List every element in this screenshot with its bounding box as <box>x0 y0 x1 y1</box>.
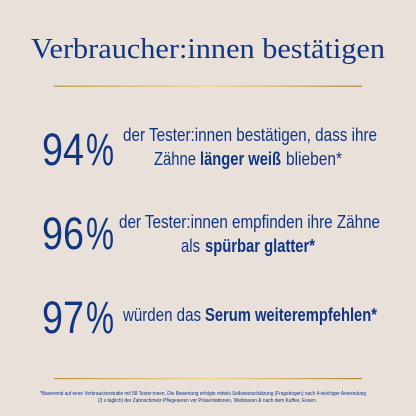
bottom gold divider <box>54 378 362 379</box>
stat number: 94%: % <box>86 124 114 175</box>
stat description line 2 <box>154 149 342 169</box>
stat number: 94%: 94 <box>42 124 84 175</box>
stat description line 2: spürbar glatter* <box>205 236 315 256</box>
stat description line 2: Zähne <box>154 149 196 169</box>
footnote <box>40 391 366 404</box>
stat description: würden das <box>122 305 201 325</box>
stat description <box>122 305 377 325</box>
stat number: 97%: % <box>86 292 114 343</box>
stat description line 2 <box>181 236 315 256</box>
stat number: 97% <box>42 292 114 343</box>
stat number: 94% <box>42 124 114 175</box>
stat description: Serum weiterempfehlen* <box>205 305 377 325</box>
stat number: 96% <box>42 208 114 259</box>
stat row: 96% <box>42 208 380 259</box>
stat number: 96%: % <box>86 208 114 259</box>
stat row: 94% <box>42 124 377 175</box>
title: Verbraucher:innen bestätigen <box>31 33 386 65</box>
stat description line 2: länger weiß <box>200 149 281 169</box>
stat description line 2: als <box>181 236 200 256</box>
footnote: (3 x täglich) der Zahnschmelz Pflegeseren vor Präsentationen, Webinaren & nach dem Kaffee, Essen. <box>98 398 317 404</box>
stat row: 97% <box>42 292 377 343</box>
stat number: 97%: 97 <box>42 292 84 343</box>
stat description line 2: blieben* <box>286 149 342 169</box>
top gold divider <box>54 86 362 87</box>
stat number: 96%: 96 <box>42 208 84 259</box>
footnote: *Basierend auf einer Verbraucherstudie mit 58 Tester:innen. Die Bewertung erfolgte mittels Selbsteinschätzung (Fragebogen) nach 4-wöchiger Anwendung <box>40 391 366 397</box>
stat description line 1: der Tester:innen bestätigen, dass ihre <box>123 125 377 145</box>
